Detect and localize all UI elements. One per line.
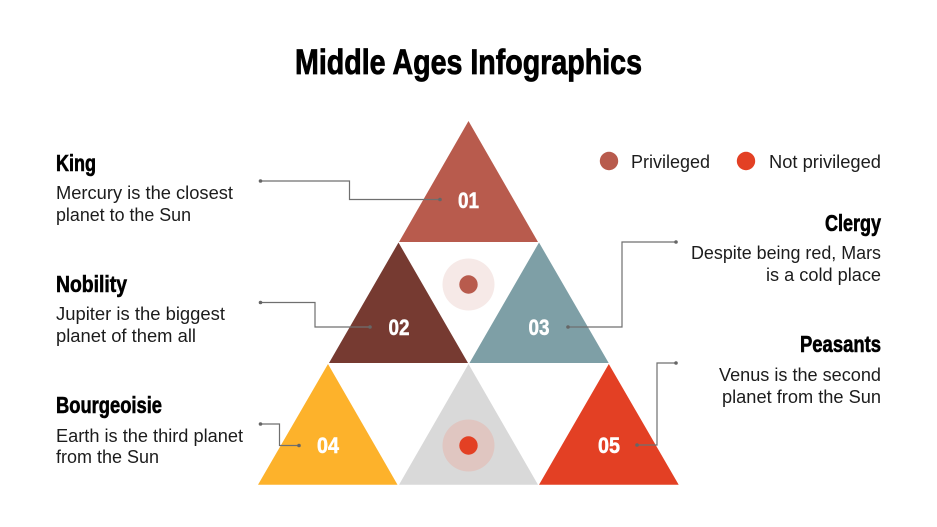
text block: peasants description: Venus is the second — [719, 365, 881, 385]
text block: nobility description: Jupiter is the biggest — [56, 304, 225, 324]
panel: clergy text — [691, 210, 881, 285]
panel: king text — [56, 150, 233, 225]
arrow: king connector — [259, 179, 442, 201]
panel: peasants text — [719, 331, 881, 407]
number 01: 01 — [458, 188, 479, 213]
triangle 05: peasants — [539, 364, 679, 485]
text block: king description: planet to the Sun — [56, 205, 191, 225]
triangle: grey centre — [399, 364, 538, 485]
text block: bourgeoisie description: Earth is the third planet — [56, 426, 243, 446]
title: Middle Ages Infographics — [295, 43, 642, 82]
text block: clergy description: Despite being red, Mars — [691, 243, 881, 263]
number 02: 02 — [388, 315, 410, 340]
icon: privileged target — [442, 258, 494, 310]
text block: peasants description: planet from the Sun — [722, 387, 881, 407]
legend item: not privileged: Not privileged — [769, 152, 881, 172]
number 04: 04 — [317, 433, 340, 458]
triangle 01: king — [399, 121, 538, 242]
arrow: clergy connector — [566, 240, 678, 329]
icon: not privileged target — [442, 420, 494, 472]
number 05: 05 — [598, 433, 620, 458]
text block: nobility description: planet of them all — [56, 326, 196, 346]
triangle 02: nobility — [329, 242, 468, 363]
text block: bourgeoisie description: from the Sun — [56, 447, 159, 467]
panel: bourgeoisie text — [56, 392, 243, 467]
arrow: bourgeoisie connector — [259, 422, 301, 447]
triangle 03: clergy — [470, 242, 609, 363]
legend — [600, 152, 881, 172]
text block: clergy description: is a cold place — [766, 265, 881, 285]
legend item: privileged: Privileged — [631, 152, 710, 172]
heading: nobility: Nobility — [56, 271, 127, 297]
triangle 04: bourgeoisie — [258, 364, 398, 485]
text block: king description: Mercury is the closest — [56, 183, 233, 203]
heading: bourgeoisie: Bourgeoisie — [56, 392, 162, 418]
panel: nobility text — [56, 271, 225, 346]
number 03: 03 — [528, 315, 550, 340]
heading: clergy: Clergy — [825, 210, 881, 236]
heading: king: King — [56, 150, 96, 176]
heading: peasants: Peasants — [800, 331, 881, 357]
arrow: peasants connector — [635, 361, 678, 447]
arrow: nobility connector — [259, 301, 372, 329]
